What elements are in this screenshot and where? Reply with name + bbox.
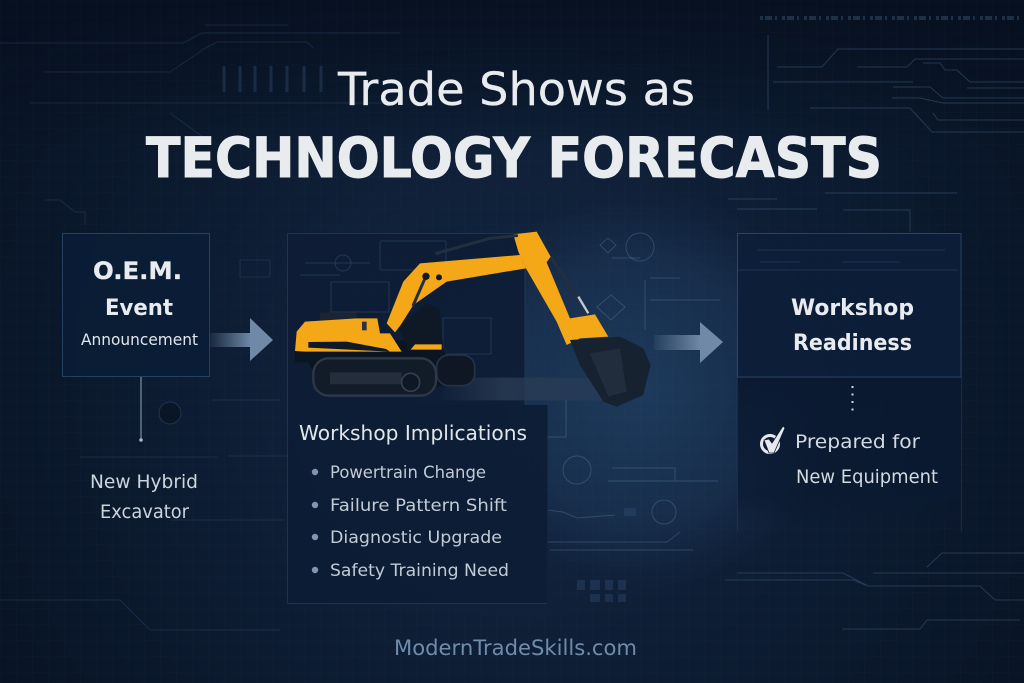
bullet list: Safety Training Need: [330, 561, 509, 581]
bullet list: Powertrain Change: [330, 463, 486, 483]
text: prepared for new equipment: [795, 431, 938, 488]
arrow: event to workshop implications: [210, 318, 273, 361]
panel: OEM event: [62, 234, 210, 376]
text: announcement: Announcement: [81, 330, 198, 349]
bullet list: Diagnostic Upgrade: [330, 528, 502, 548]
text: new hybrid excavator: New Hybrid: [90, 471, 198, 493]
dotted connector: [852, 386, 854, 416]
text: new hybrid excavator: Excavator: [100, 501, 189, 523]
icon: excavator: [295, 232, 651, 407]
heading: event: Event: [105, 296, 173, 321]
text: prepared for new equipment: New Equipment: [796, 466, 938, 488]
bullet list: Failure Pattern Shift: [330, 496, 507, 516]
heading: workshop readiness: [791, 296, 914, 356]
panel: workshop implications: [288, 233, 548, 604]
panel: workshop readiness: [737, 234, 962, 532]
heading: workshop implications: Workshop Implications: [299, 421, 527, 445]
title: Trade Shows as: [337, 63, 695, 116]
title: TECHNOLOGY FORECASTS: [146, 126, 882, 190]
arrow: implications to readiness: [654, 322, 723, 363]
title: [146, 63, 882, 190]
connector: announcement to excavator: [139, 377, 143, 442]
text: new hybrid excavator: [90, 471, 198, 523]
footer: website: ModernTradeSkills.com: [394, 636, 637, 660]
bullet list: [312, 463, 509, 581]
heading: workshop readiness: Workshop: [791, 296, 914, 321]
heading: workshop readiness: Readiness: [793, 331, 912, 356]
icon: check mark: [762, 426, 785, 453]
panel backdrop circuitry: [300, 233, 525, 405]
text: prepared for new equipment: Prepared for: [795, 431, 920, 453]
heading: OEM: O.E.M.: [93, 257, 182, 285]
